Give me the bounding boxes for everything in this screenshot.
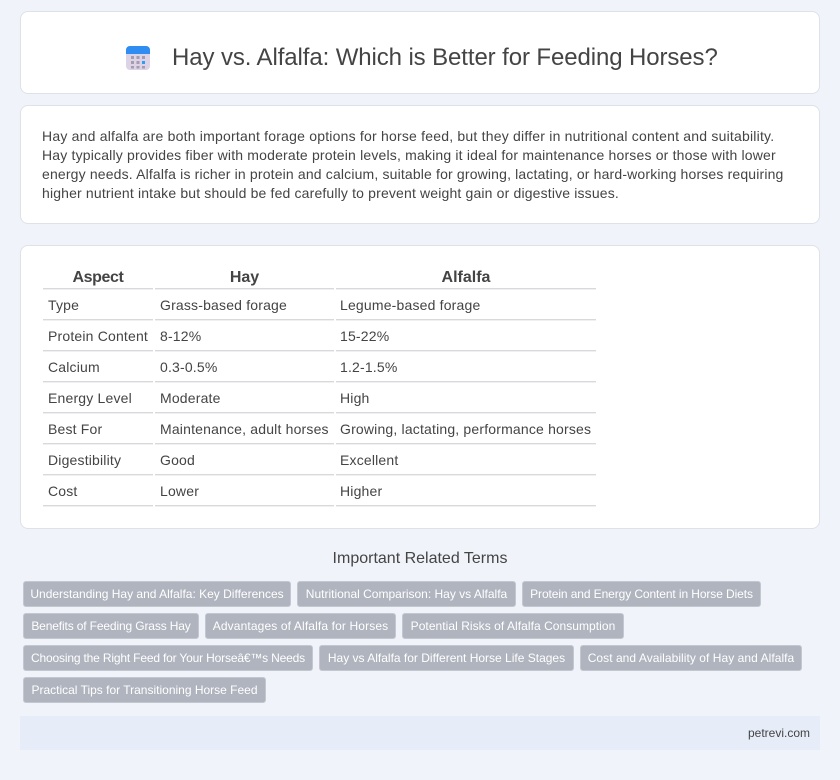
row: energy level: Moderate [160, 390, 221, 406]
tag [23, 613, 199, 639]
intro text panel: higher nutrient intake but should be fed carefully to prevent weight gain or digestive issues. [42, 185, 619, 201]
tag: Advantages of Alfalfa for Horses [213, 619, 388, 633]
row: best for: Growing, lactating, performance horses [340, 421, 591, 437]
row: calcium: Calcium [48, 359, 100, 375]
intro text panel [20, 105, 820, 224]
tag [522, 581, 761, 607]
tag: Protein and Energy Content in Horse Diets [530, 587, 753, 601]
tag: Understanding Hay and Alfalfa: Key Differences [30, 587, 284, 601]
header panel [20, 11, 820, 94]
tag [319, 645, 574, 671]
tag [205, 613, 396, 639]
tag [580, 645, 802, 671]
tag: Cost and Availability of Hay and Alfalfa [588, 651, 794, 665]
tag: Choosing the Right Feed for Your Horseâ€™s Needs [31, 651, 305, 665]
table header: Aspect [73, 269, 123, 286]
row: best for: Maintenance, adult horses [160, 421, 329, 437]
tag: Nutritional Comparison: Hay vs Alfalfa [306, 587, 507, 601]
tag: Potential Risks of Alfalfa Consumption [411, 619, 615, 633]
row: protein content: 8-12% [160, 328, 201, 344]
tag: Hay vs Alfalfa for Different Horse Life Stages [328, 651, 565, 665]
tag [23, 581, 291, 607]
row: digestibility [48, 452, 398, 468]
row: cost [48, 483, 382, 499]
footer bar [20, 716, 820, 750]
comparison table panel [20, 245, 820, 529]
intro text panel: Hay typically provides fiber with moderate protein levels, making it ideal for maintenance horses or those with lower [42, 147, 776, 163]
row: type: Grass-based forage [160, 297, 287, 313]
row: best for: Best For [48, 421, 102, 437]
related terms heading: Important Related Terms [333, 550, 507, 567]
tag [297, 581, 516, 607]
tag: Benefits of Feeding Grass Hay [31, 619, 191, 633]
row: calcium: 1.2-1.5% [340, 359, 397, 375]
tag [23, 677, 266, 703]
row: type: Type [48, 297, 79, 313]
row: digestibility: Good [160, 452, 195, 468]
row: cost: Lower [160, 483, 199, 499]
row: cost: Higher [340, 483, 382, 499]
intro text panel: energy needs. Alfalfa is richer in protein and calcium, suitable for growing, lactating, or hard-working horses requiring [42, 166, 784, 182]
intro text panel: Hay and alfalfa are both important forage options for horse feed, but they differ in nutritional content and suitability. [42, 128, 774, 144]
row: best for [48, 421, 591, 437]
tag: Practical Tips for Transitioning Horse Feed [31, 683, 258, 697]
row: digestibility: Digestibility [48, 452, 121, 468]
row: calcium: 0.3-0.5% [160, 359, 217, 375]
row: digestibility: Excellent [340, 452, 398, 468]
row: energy level: High [340, 390, 370, 406]
row: type [48, 297, 480, 313]
row: cost: Cost [48, 483, 78, 499]
table header: Alfalfa [442, 269, 490, 286]
tag [402, 613, 624, 639]
row: energy level: Energy Level [48, 390, 132, 406]
related terms tags [23, 581, 802, 703]
footer source: petrevi.com [748, 726, 810, 740]
title: Hay vs. Alfalfa: Which is Better for Feeding Horses? [172, 44, 718, 71]
row: protein content: Protein Content [48, 328, 148, 344]
row: protein content: 15-22% [340, 328, 389, 344]
table header: Hay [230, 269, 259, 286]
row: protein content [48, 328, 389, 344]
table header [72, 269, 490, 286]
row: calcium [48, 359, 397, 375]
row: type: Legume-based forage [340, 297, 480, 313]
icon: calendar [126, 46, 150, 70]
row: energy level [48, 390, 370, 406]
tag [23, 645, 313, 671]
